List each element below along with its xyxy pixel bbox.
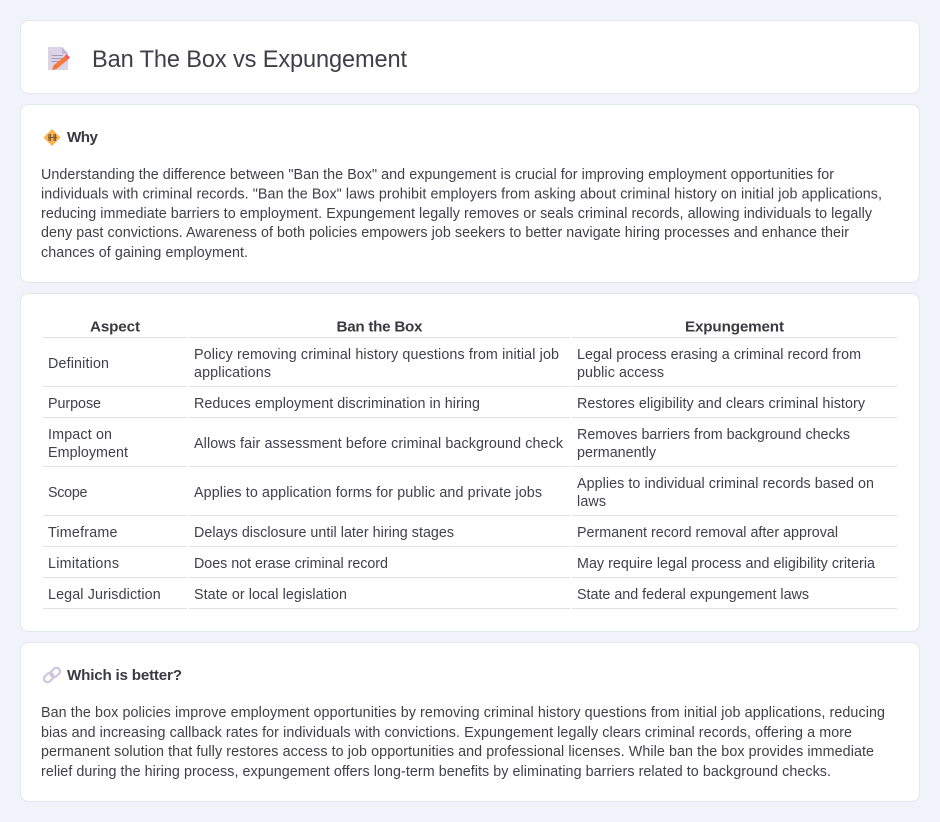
row: purpose: Purpose — [48, 396, 101, 412]
row: legal jurisdiction: State or local legislation — [194, 587, 347, 603]
row: limitations: Does not erase criminal record — [194, 556, 388, 572]
row: definition: applications — [194, 365, 271, 381]
row: timeframe: Timeframe — [48, 525, 118, 541]
row: definition: Legal process erasing a criminal record from — [577, 347, 861, 363]
row: legal jurisdiction — [48, 587, 809, 603]
text block: why: individuals with criminal records. "Ban the Box" laws prohibit employers from asking about criminal history on initial job applications, — [41, 186, 882, 202]
row: impact on employment: Allows fair assessment before criminal background check — [194, 436, 564, 452]
row: legal jurisdiction: Legal Jurisdiction — [48, 587, 161, 603]
text block: why: deny past convictions. Awareness of both policies empowers job seekers to better navigate hiring processes and enhance their — [41, 225, 849, 241]
text block: which is better — [41, 705, 885, 780]
row: scope: Applies to application forms for public and private jobs — [194, 485, 542, 501]
row: timeframe: Delays disclosure until later hiring stages — [194, 525, 454, 541]
row: scope: Scope — [48, 485, 88, 501]
panel: why — [20, 104, 920, 282]
row: definition — [48, 347, 861, 381]
text block: why: reducing immediate barriers to employment. Expungement legally removes or seals criminal records, allowing individuals to legally — [41, 206, 873, 222]
text block: which is better: bias and increasing callback rates for individuals with convictions. Expungement legally clears criminal records, offering a more — [41, 725, 852, 741]
table header: Aspect — [90, 318, 140, 336]
row: timeframe: Permanent record removal after approval — [577, 525, 838, 541]
row: definition: Definition — [48, 356, 109, 372]
row: purpose: Restores eligibility and clears criminal history — [577, 396, 866, 412]
row: limitations: May require legal process and eligibility criteria — [577, 556, 875, 572]
row: impact on employment: permanently — [577, 445, 657, 461]
row: legal jurisdiction: State and federal expungement laws — [577, 587, 809, 603]
row: limitations — [48, 556, 875, 572]
row: scope: laws — [577, 494, 606, 510]
row: timeframe — [48, 525, 838, 541]
row: impact on employment: Employment — [48, 445, 128, 461]
table header — [90, 318, 784, 336]
title: Ban The Box vs Expungement — [92, 47, 407, 73]
panel: comparison table — [20, 294, 920, 632]
icon: link — [43, 666, 61, 684]
row: impact on employment: Removes barriers from background checks — [577, 427, 850, 443]
row: scope: Applies to individual criminal records based on — [577, 476, 874, 492]
row: definition: Policy removing criminal history questions from initial job — [194, 347, 559, 363]
row: impact on employment — [48, 427, 850, 461]
text block: which is better: permanent solution that fully restores access to job opportunities and professional licenses. While ban the box provides immediate — [41, 744, 874, 760]
text block: why: chances of gaining employment. — [41, 245, 248, 261]
row: definition: public access — [577, 365, 664, 381]
table header: Expungement — [685, 318, 784, 336]
heading: why: Why — [67, 129, 99, 146]
row: impact on employment: Impact on — [48, 427, 112, 443]
text block: which is better: Ban the box policies improve employment opportunities by removing criminal history questions from initial job applications, reducing — [41, 705, 885, 721]
heading: which is better: Which is better? — [67, 667, 182, 684]
row: scope — [48, 476, 874, 510]
panel: which is better — [20, 642, 920, 802]
row: purpose: Reduces employment discrimination in hiring — [194, 396, 480, 412]
text block: why: Understanding the difference between "Ban the Box" and expungement is crucial for improving employment opportunities for — [41, 167, 834, 183]
icon: document with pencil — [48, 47, 70, 70]
row: purpose — [48, 396, 866, 412]
row: limitations: Limitations — [48, 556, 119, 572]
text block: which is better: relief during the hiring process, expungement offers long-term benefits by eliminating barriers related to background checks. — [41, 764, 831, 780]
table header: Ban the Box — [336, 318, 423, 336]
text block: why — [41, 167, 882, 261]
icon: warning diamond — [44, 129, 60, 146]
panel: title header — [20, 20, 920, 94]
